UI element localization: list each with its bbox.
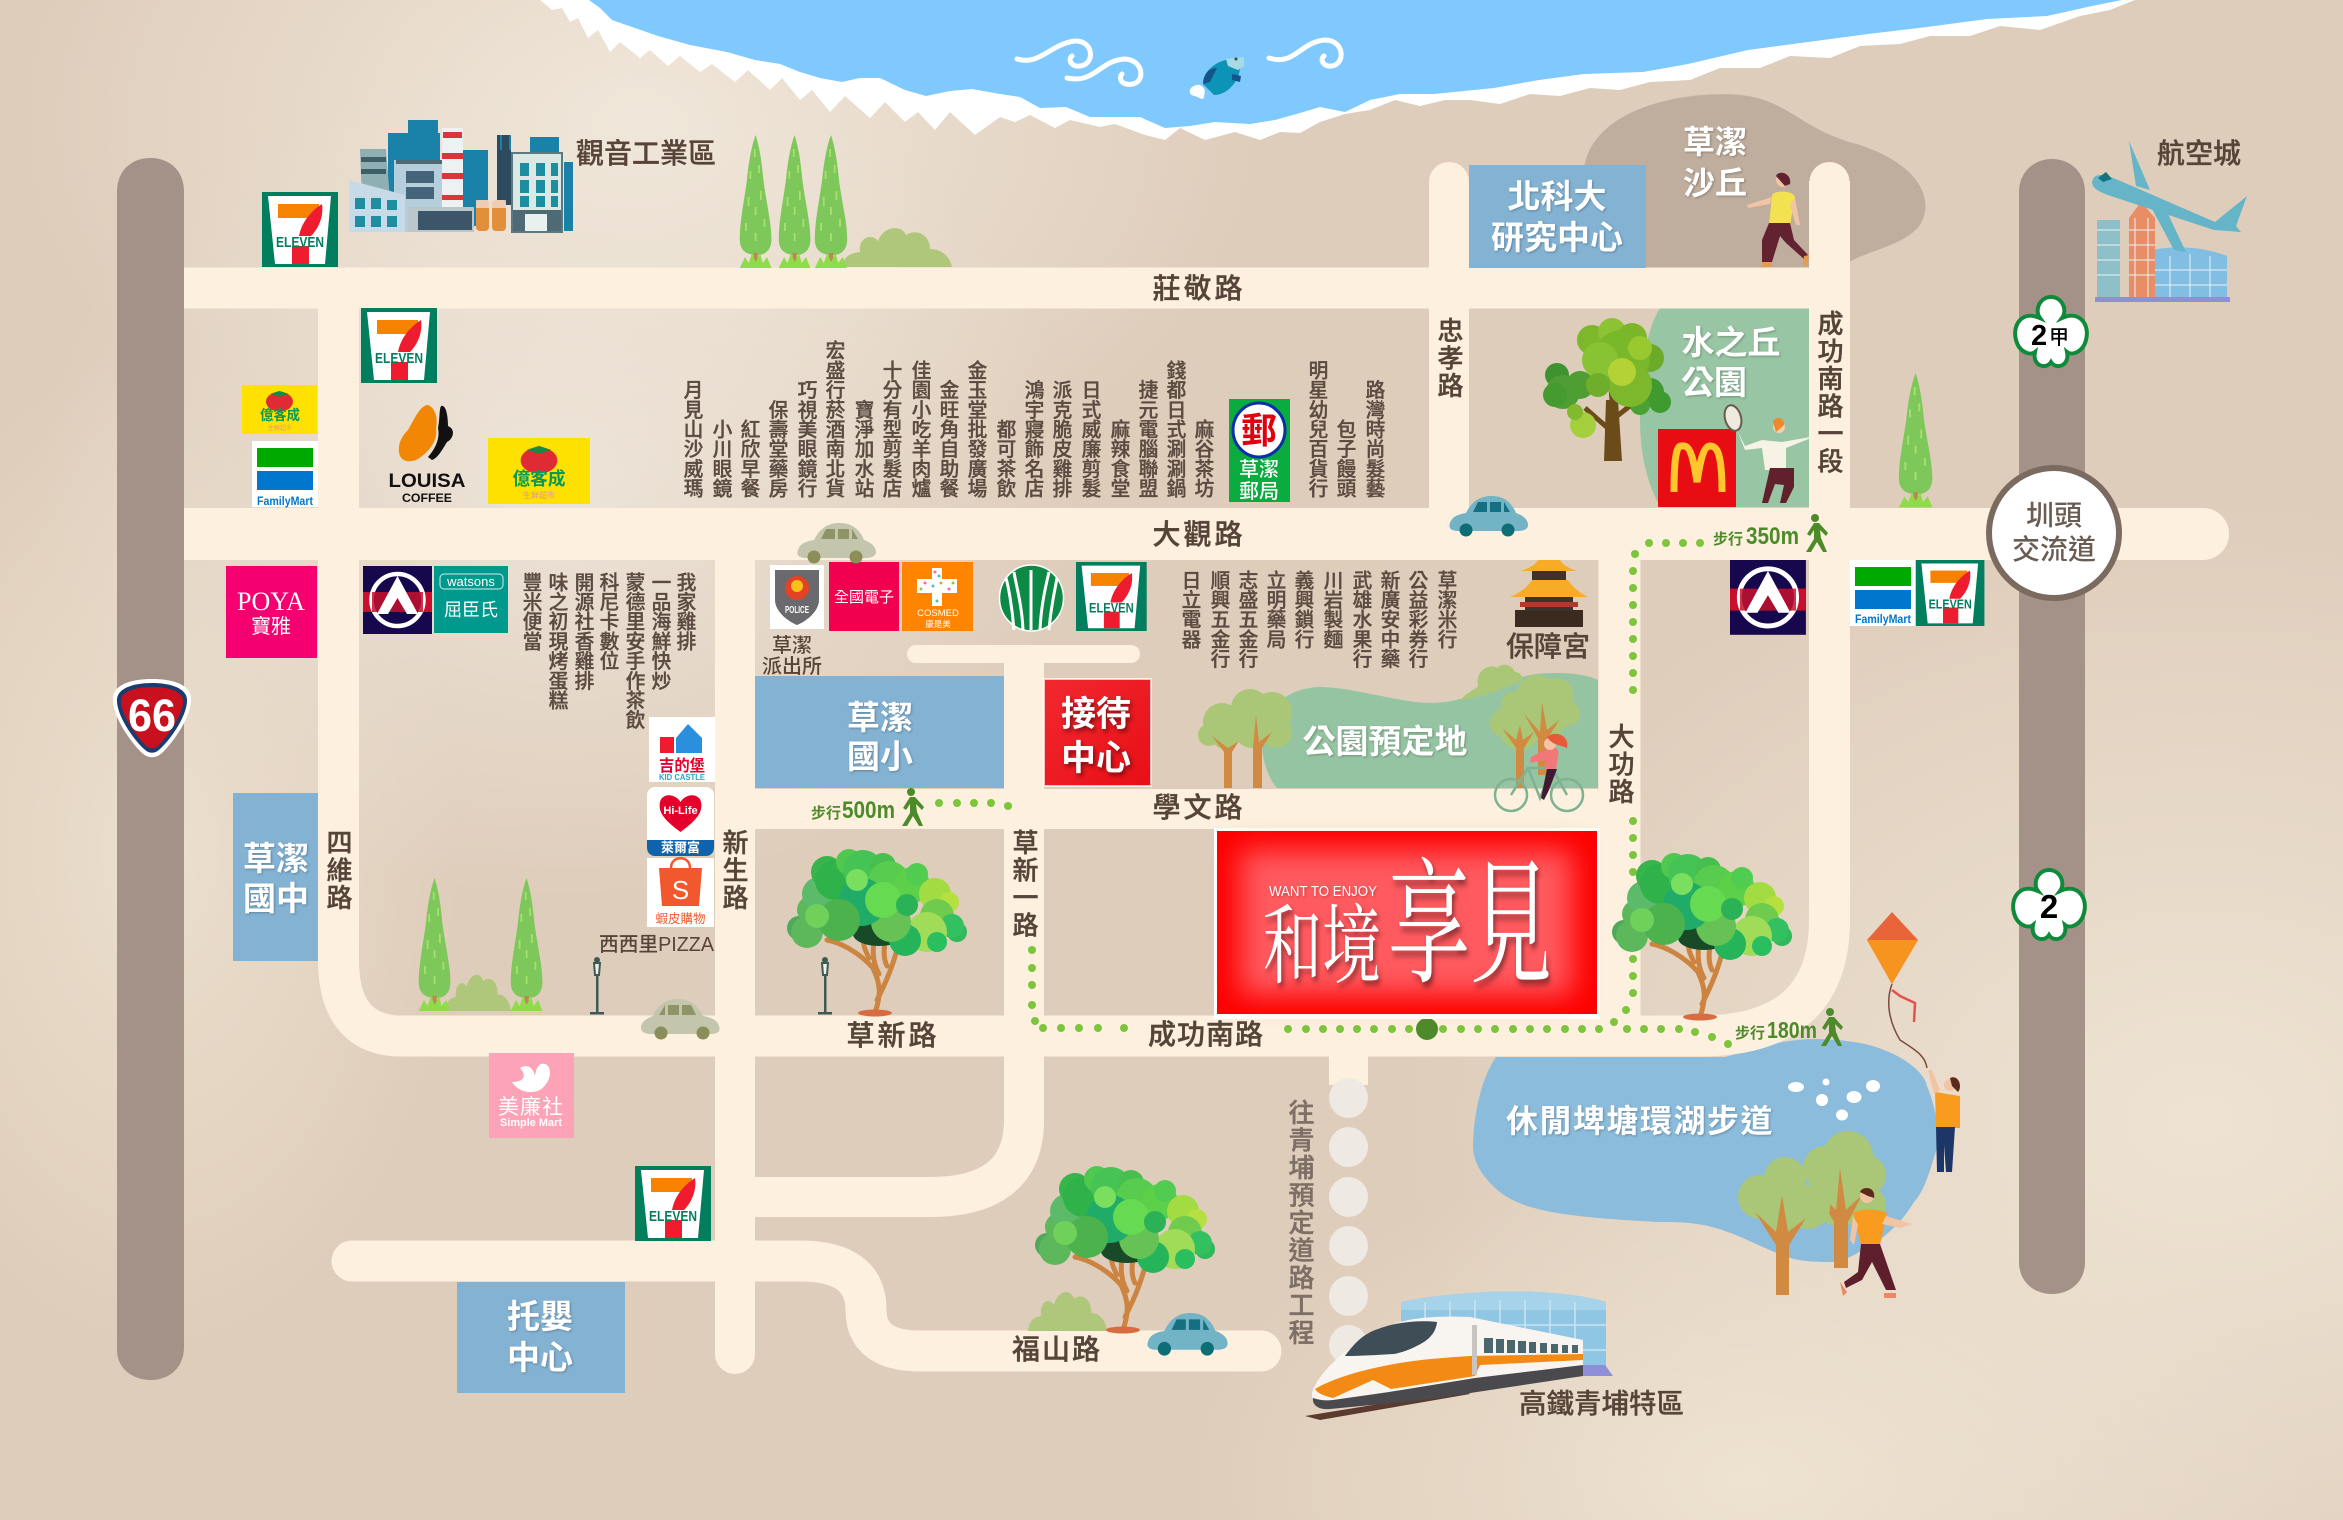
logo: Yes supermarket small: 億客成 [260, 407, 300, 423]
logo: Hi-Life [647, 787, 714, 856]
store list: south side of 大觀路 east [1178, 570, 1457, 668]
store list: north side of 大觀路: 佳園小吃羊肉爐 [908, 360, 931, 498]
logo: RT-Mart left [363, 566, 432, 634]
park blob: 水之丘 [1640, 308, 1812, 507]
person: boy by lake [1840, 1188, 1912, 1298]
park blob: 公園預定地 [1262, 673, 1598, 788]
label block: 草潔國小: 草潔 [847, 699, 913, 736]
store list: south side of 大觀路 west: 一品海鮮快炒 [648, 572, 671, 690]
logo: FamilyMart right: FamilyMart [1855, 612, 1911, 626]
logo: FamilyMart left: FamilyMart [257, 494, 313, 508]
store list: north side of 大觀路: 宏盛行菸酒南北貨 [822, 340, 845, 498]
tree: cypress by 大觀路 [1899, 373, 1932, 507]
store list: north side of 大觀路: 錢都日式涮涮鍋 [1163, 360, 1186, 498]
highway 66 [117, 158, 184, 1380]
store list: north side of 大觀路: 麻辣食堂 [1107, 419, 1130, 498]
logo: Louisa Coffee [388, 405, 466, 505]
lake [1473, 1039, 1938, 1262]
label block: 北科大研究中心: 研究中心 [1491, 219, 1623, 256]
store list: north side of 大觀路: 日式威廉剪髮 [1078, 380, 1101, 498]
logo: Cosmed: 康是美 [925, 619, 951, 629]
store list: north side of 大觀路: 保壽堂藥房 [765, 400, 788, 498]
logo: Kid Castle [649, 717, 715, 782]
tree: 草新路 green tree [787, 849, 967, 1016]
store list: south side of 大觀路 east: 新廣安中藥 [1377, 570, 1400, 668]
trees: beside planned park left [1198, 689, 1292, 788]
logo: Watsons: 屈臣氏 [444, 600, 498, 620]
tree: 水之丘 park tree [1543, 318, 1671, 461]
tree: 福山路 green tree [1028, 1166, 1215, 1334]
store list: south side of 大觀路 west [519, 572, 696, 730]
label: 水之丘公園: 公園 [1681, 364, 1747, 401]
label: 公園預定地: 公園預定地 [1302, 723, 1468, 760]
label: 草潔派出所 [762, 634, 822, 678]
store list: north side of 大觀路: 十分有型剪髮店 [879, 360, 902, 498]
store list: south side of 大觀路 east: 草潔米行 [1434, 570, 1457, 649]
icon: fish [1190, 57, 1244, 99]
hero sign: 和境享見 [1214, 828, 1600, 1019]
lamp post left [590, 957, 604, 1014]
icon: temple 保障宮 [1510, 560, 1588, 627]
store list: south side of 大觀路 east: 川岩製麵 [1320, 570, 1343, 649]
store list: south side of 大觀路 west: 味之初現烤蛋糕 [545, 572, 568, 710]
tree: green tree near 大功路 [1612, 853, 1792, 1020]
highway 2 [2019, 159, 2085, 1294]
store list: north side of 大觀路: 麻谷茶坊 [1191, 419, 1214, 498]
label: 高鐵青埔特區: 高鐵青埔特區 [1519, 1388, 1684, 1419]
label: 保障宮: 保障宮 [1506, 631, 1590, 662]
walk label: 180m [1735, 1008, 1843, 1046]
label block: 草潔國小: 國小 [847, 738, 913, 775]
store list: north side of 大觀路: 派克脆皮雞排 [1049, 380, 1072, 498]
walk label: 350m [1713, 514, 1828, 552]
logo: Yes supermarket large: 生鮮超市 [523, 490, 555, 500]
logo: 7-ELEVEN near interchange: ELEVEN [1929, 597, 1972, 611]
trees: top cypress trio [740, 135, 952, 268]
road labels: 大功路 [1605, 723, 1635, 806]
logo: 7-ELEVEN 新生路 [635, 1166, 711, 1241]
road labels: 四維路 [323, 829, 353, 912]
store list: north side of 大觀路: 紅欣早餐 [737, 419, 760, 498]
road network [184, 172, 2216, 1364]
logo: Simple Mart: Simple Mart [500, 1117, 562, 1129]
lake bubbles [1788, 1078, 1880, 1120]
logo: Shopee: 蝦皮購物 [655, 912, 706, 926]
hero sign: 和境享見: WANT TO ENJOY [1269, 884, 1377, 900]
logo: 7-ELEVEN 莊敬路: ELEVEN [375, 350, 423, 367]
walk label: 180m: 180m [1767, 1017, 1817, 1043]
reception center block: 接待 [1061, 695, 1131, 734]
site marker dot [1416, 1018, 1438, 1040]
road labels: 大觀路 [1152, 519, 1246, 550]
icon: airplane [2092, 141, 2247, 252]
waves in sea [1017, 40, 1341, 84]
store list: south side of 大觀路 east: 義興鎖行 [1291, 570, 1314, 649]
logo: 7-ELEVEN 莊敬路 [361, 308, 437, 383]
walk label: 500m [811, 788, 924, 826]
person: dune walker [1747, 173, 1809, 267]
logo: Louisa Coffee: LOUISA [388, 471, 466, 492]
sand dune blob [1584, 94, 1925, 290]
walk label: 350m: 步行 [1713, 531, 1743, 548]
road labels: 福山路 [1012, 1334, 1102, 1365]
road labels: 草新路 [846, 1020, 940, 1051]
logo: Simple Mart: 美廉社 [498, 1096, 564, 1119]
sign: freeway interchange 圳頭交流道 [1989, 468, 2119, 598]
store list: north side of 大觀路: 金旺角自助餐 [936, 380, 959, 498]
road labels: 新生路 [719, 829, 749, 912]
logo: RT-Mart right [1730, 560, 1806, 635]
hero sign: 和境享見: 和境 [1263, 899, 1381, 995]
logo: 全國電子: 全國電子 [834, 589, 894, 606]
label block: 草潔國中 [233, 793, 318, 961]
logo: Hi-Life: 萊爾富 [661, 840, 700, 855]
store list: north side of 大觀路: 寶淨加水站 [851, 400, 874, 498]
logo: Cosmed: COSMED [917, 608, 959, 619]
walking route dots [935, 539, 1732, 1048]
logo: 7-ELEVEN 大觀路: ELEVEN [1089, 600, 1134, 616]
store list: north side of 大觀路: 明星幼兒百貨行 [1305, 360, 1328, 498]
label: 西西里PIZZA: 西西里PIZZA [599, 934, 715, 956]
logo: POYA [226, 566, 317, 658]
icon: high speed rail station [1401, 1292, 1613, 1376]
label block: 托嬰中心: 中心 [507, 1339, 573, 1376]
logo: 全國電子 [829, 562, 899, 631]
walk label: 350m: 350m [1746, 523, 1799, 550]
walk label: 500m: 500m [842, 797, 895, 824]
store list: north side of 大觀路: 巧視美眼鏡行 [794, 380, 817, 498]
store list: south side of 大觀路 west: 科尼卡數位 [596, 572, 619, 670]
label: 休閒埤塘環湖步道: 休閒埤塘環湖步道 [1506, 1103, 1774, 1139]
label: 草潔派出所: 草潔 [772, 634, 812, 657]
logo: POYA: 寶雅 [251, 615, 291, 638]
logo: post office [1229, 399, 1290, 503]
sign: provincial road 2甲: 甲 [2049, 327, 2069, 349]
store list: south side of 大觀路 west: 豐米便當 [519, 572, 542, 651]
logo: Hi-Life: Hi-Life [663, 805, 698, 817]
car: grey on 大觀路 [797, 523, 876, 564]
logo: 7-ELEVEN 新生路: ELEVEN [649, 1208, 697, 1225]
icon: kite with string [1867, 912, 1927, 1068]
person: kite flyer [1928, 1070, 1960, 1172]
logo: Cosmed [902, 562, 973, 631]
store list: south side of 大觀路 east: 武雄水果行 [1349, 570, 1372, 668]
label: 觀音工業區: 觀音工業區 [576, 138, 716, 169]
sign: highway 66 shield [113, 679, 191, 757]
car: grey on 草新路 [641, 999, 720, 1040]
logo: Kid Castle: KID CASTLE [659, 773, 706, 782]
car: teal on 福山路 [1147, 1313, 1228, 1356]
icon: industrial park buildings [349, 120, 573, 232]
label block: 草潔國小 [755, 676, 1004, 788]
store list: north side of 大觀路: 金玉堂批發廣場 [964, 360, 987, 498]
logo: 7-ELEVEN near industrial park: ELEVEN [276, 234, 324, 251]
road labels: 成功南路一段 [1814, 310, 1844, 475]
logo: Yes supermarket large: 億客成 [512, 468, 566, 489]
icon: aerotropolis buildings [2095, 202, 2230, 302]
label: 水之丘公園 [1681, 324, 1780, 401]
sign: freeway interchange 圳頭交流道: 交流道 [2012, 534, 2096, 565]
logo: Simple Mart [489, 1053, 574, 1138]
logo: Yes supermarket small: 生鮮超市 [268, 424, 292, 432]
logo: Louisa Coffee: COFFEE [402, 491, 452, 505]
logo: POYA: POYA [237, 587, 305, 616]
sign: freeway interchange 圳頭交流道: 圳頭 [2026, 500, 2082, 531]
store list: north side of 大觀路: 包子饅頭 [1333, 419, 1356, 498]
walk label: 500m: 步行 [811, 805, 841, 822]
car: teal on 大觀路 [1449, 496, 1528, 536]
sea with foam edge [540, 0, 2135, 140]
store list: north side of 大觀路: 鴻宇寢飾名店 [1021, 380, 1044, 498]
sign: provincial road 2甲 [2015, 297, 2087, 366]
label: 水之丘公園: 水之丘 [1682, 324, 1780, 361]
store list: south side of 大觀路 east: 立明藥局 [1263, 570, 1286, 649]
sign: highway 66 shield: 66 [128, 690, 176, 741]
road labels: 學文路 [1152, 792, 1246, 823]
logo: Yes supermarket large [488, 438, 590, 504]
sign: provincial road 2甲: 2 [2031, 320, 2047, 352]
label: 草潔沙丘: 草潔 [1683, 124, 1747, 160]
store list: north side of 大觀路: 小川眼鏡 [709, 419, 732, 498]
lamp post right [818, 957, 832, 1014]
logo: post office: 郵 [1241, 410, 1277, 451]
logo: Yes supermarket small [242, 385, 317, 434]
label block: 托嬰中心: 托嬰 [507, 1298, 573, 1335]
label: 航空城: 航空城 [2157, 138, 2241, 169]
logo: Cathay green tree [1000, 565, 1064, 631]
logo: FamilyMart left [252, 441, 318, 508]
logo: FamilyMart right [1850, 560, 1915, 626]
store list: north side of 大觀路: 捷元電腦聯盟 [1135, 380, 1158, 498]
logo: Shopee: S [672, 875, 689, 905]
reception center block [1044, 679, 1151, 786]
trees: beside planned park right [1460, 665, 1580, 788]
label block: 北科大研究中心 [1469, 165, 1646, 268]
logo: 7-ELEVEN 大觀路 [1076, 562, 1147, 631]
logo: post office: 草潔 [1239, 458, 1279, 481]
store list: south side of 大觀路 west: 開源社香雞排 [571, 572, 594, 690]
sign: provincial road 2 [2013, 870, 2085, 939]
sign: provincial road 2: 2 [2040, 888, 2058, 925]
store list: north side of 大觀路: 都可茶飲 [993, 419, 1016, 498]
logo: Kid Castle: 吉的堡 [659, 756, 705, 775]
logo: police badge [770, 565, 824, 629]
label block: 草潔國中: 草潔 [243, 840, 309, 877]
logo: Shopee [647, 858, 714, 927]
logo: post office: 郵局 [1239, 480, 1279, 503]
road labels: 草新一路 [1009, 829, 1039, 939]
label block: 草潔國中: 國中 [243, 880, 309, 917]
logo: 7-ELEVEN near interchange [1916, 560, 1984, 626]
icon: high speed train [1305, 1317, 1583, 1420]
trees: cypress pair with shrub [419, 878, 542, 1011]
planned road dots [1329, 1078, 1368, 1365]
road labels: 莊敬路 [1152, 273, 1246, 304]
store list: north side of 大觀路 [680, 340, 1385, 499]
store list: south side of 大觀路 east: 日立電器 [1178, 570, 1201, 649]
person: tennis player [1722, 403, 1816, 503]
store list: south side of 大觀路 east: 順興五金行 [1207, 570, 1230, 668]
store list: south side of 大觀路 east: 公益彩券行 [1405, 570, 1428, 668]
hero sign: 和境享見: 享見 [1388, 852, 1552, 1002]
label block: 北科大研究中心: 北科大 [1508, 178, 1606, 215]
logo: Watsons [434, 566, 508, 633]
logo: police badge: POLICE [785, 605, 809, 616]
store list: north side of 大觀路: 路灣時尚髮藝 [1362, 380, 1385, 499]
store list: south side of 大觀路 west: 蒙德里安手作茶飲 [622, 572, 645, 730]
logo: McDonald's [1658, 429, 1736, 507]
store list: north side of 大觀路: 月見山沙威瑪 [680, 380, 703, 498]
store list: south side of 大觀路 east: 志盛五金行 [1235, 570, 1258, 668]
label block: 托嬰中心 [457, 1282, 625, 1393]
store list: south side of 大觀路 west: 我家雞排 [673, 572, 696, 651]
reception center block: 中心 [1061, 739, 1131, 778]
road labels: 往青埔預定道路工程 [1285, 1099, 1315, 1346]
label: 草潔派出所: 派出所 [762, 655, 822, 678]
road labels [323, 273, 1844, 1365]
walk label: 180m: 步行 [1735, 1025, 1765, 1042]
logo: 7-ELEVEN near industrial park [262, 192, 338, 267]
lake trees [1738, 1131, 1886, 1295]
road labels: 忠孝路 [1434, 317, 1464, 400]
label: 草潔沙丘 [1683, 124, 1747, 201]
person: cyclist [1495, 734, 1583, 811]
road labels: 成功南路 [1148, 1019, 1264, 1050]
label: 草潔沙丘: 沙丘 [1683, 165, 1747, 201]
logo: Watsons: watsons [446, 574, 495, 589]
